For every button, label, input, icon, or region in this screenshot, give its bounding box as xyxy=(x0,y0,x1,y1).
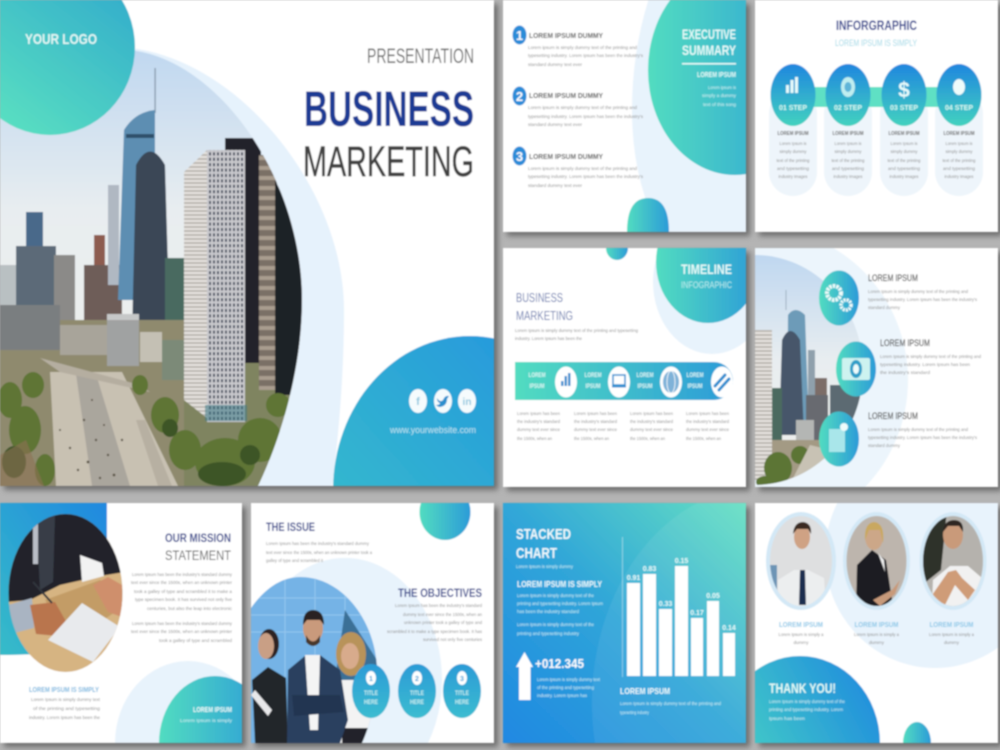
bar chart: 0.14 xyxy=(722,625,736,632)
text: mission paragraphs: type specimen book. It has survived not only five xyxy=(135,597,232,602)
list item 2: typesetting industry. Lorem Ipsum has been the industry's xyxy=(528,114,644,119)
panel: timeline slide: Lorem Ipsum is simply dummy text of the printing and typesetting xyxy=(515,328,638,333)
text: mission paragraphs xyxy=(131,572,233,643)
badge 3: TITLE xyxy=(455,690,470,697)
step 2 xyxy=(826,64,870,179)
text block 2 xyxy=(880,338,981,375)
text: mission paragraphs: took a galley of type and scrambled xyxy=(159,638,232,643)
panel: three points slide xyxy=(754,247,999,488)
text block 1 xyxy=(868,273,978,310)
step 4: 04 STEP xyxy=(945,105,973,112)
step 2: and typesetting xyxy=(832,166,864,171)
panel: mission slide xyxy=(0,503,271,743)
caption 3: Lorem Ipsum is simply a xyxy=(929,632,974,637)
heading: stacked chart: CHART xyxy=(516,545,557,562)
bar chart: 0.83 xyxy=(643,566,656,573)
text: growth figure: +012.345 xyxy=(535,656,584,671)
text: summary body: simply a dummy xyxy=(702,93,737,98)
heading: thank you: THANK YOU! xyxy=(769,680,836,696)
step 3: text of the printing xyxy=(888,158,921,163)
text: mission paragraphs: Lorem Ipsum has been the industry's standard dummy xyxy=(132,621,233,626)
text: your logo: YOUR LOGO xyxy=(25,31,97,48)
text: lorem ipsum callout: of the printing and typesetting xyxy=(33,706,100,711)
text: summary body: LOREM IPSUM xyxy=(697,72,736,79)
text: growth note: of the printing and typesetting xyxy=(537,685,594,690)
caption 3 xyxy=(929,620,974,645)
timeline columns: dummy text ever since xyxy=(574,427,617,432)
timeline band: IPSUM xyxy=(586,384,600,390)
text: mission paragraphs: text ever since the 1500s, when an unknown printer xyxy=(131,580,232,585)
portrait: woman in blazer xyxy=(843,510,910,610)
text: lorem ipsum callout: Lorem Ipsum is simply dummy text xyxy=(31,697,101,702)
step 4: LOREM IPSUM xyxy=(944,131,975,137)
list item 1 xyxy=(512,26,644,67)
step 3: Lorem Ipsum is xyxy=(890,141,918,146)
caption 2: Lorem Ipsum is simply a xyxy=(854,632,899,637)
caption 3: LOREM IPSUM xyxy=(930,620,974,629)
panel: infographic steps slide xyxy=(755,0,998,232)
text: presentation: PRESENTATION xyxy=(367,45,474,68)
text: mission paragraphs: text ever since the 1500s, when an unknown printer xyxy=(131,629,232,634)
bar chart xyxy=(622,537,736,677)
text: thank you body xyxy=(769,699,845,721)
caption 1: Lorem Ipsum is simply a xyxy=(778,632,824,637)
heading: business marketing xyxy=(516,292,574,321)
shape: small circle xyxy=(903,722,931,743)
text block 1: LOREM IPSUM xyxy=(868,273,918,284)
photo: signing document xyxy=(5,510,127,675)
shape: thank you blob xyxy=(720,656,880,743)
list item 1: typesetting industry. Lorem Ipsum has been the industry's xyxy=(528,53,644,58)
bar chart: 0.05 xyxy=(706,593,720,600)
text: thank you body: printing and typesetting industry. Lorem xyxy=(769,707,843,712)
timeline columns: the industry's standard xyxy=(574,419,617,424)
step 1: Lorem Ipsum is xyxy=(780,141,807,146)
timeline band: LOREM xyxy=(584,373,602,379)
list item 1: LOREM IPSUM DUMMY xyxy=(529,33,603,40)
text block 3: standard dummy xyxy=(868,443,901,448)
bar chart: 0.33 xyxy=(659,601,672,608)
step 4: industry Images xyxy=(944,174,974,179)
text block 3: LOREM IPSUM xyxy=(868,411,918,422)
text block 1: standard dummy xyxy=(868,305,901,310)
text block 1: Lorem Ipsum is simply dummy text of the printing and xyxy=(868,289,968,294)
timeline columns: the industry's standard xyxy=(630,419,673,424)
caption 1 xyxy=(778,620,824,645)
timeline band xyxy=(515,362,733,400)
text: summary body: Lorem ipsum is xyxy=(708,85,737,90)
badge 1 xyxy=(352,664,390,718)
text: chart description: LOREM IPSUM IS SIMPLY xyxy=(517,579,602,589)
text: chart description: printing and typesetting industry xyxy=(517,631,580,636)
step 1: industry Images xyxy=(778,174,808,179)
list item 3: 3 xyxy=(516,149,523,164)
text: objectives body xyxy=(387,603,483,642)
timeline band: IPSUM xyxy=(530,384,544,390)
panel: executive summary slide xyxy=(502,0,747,233)
text: growth note: industry. Lorem Ipsum has xyxy=(537,693,588,698)
timeline columns: the 1500s, when an xyxy=(686,436,721,441)
timeline columns: dummy text ever since xyxy=(686,427,729,432)
list item 3: typesetting industry. Lorem Ipsum has been the industry's xyxy=(528,174,644,179)
list item 1: Lorem ipsum is simply dummy text of the printing and xyxy=(528,45,637,50)
heading: our mission statement: STATEMENT xyxy=(165,547,231,563)
text: summary body xyxy=(697,72,737,107)
text: growth note: Lorem Ipsum is simply dummy text xyxy=(537,677,601,682)
step 1: LOREM IPSUM xyxy=(778,131,809,137)
badge 1: TITLE xyxy=(364,690,379,697)
step 3: simply dummy xyxy=(890,149,918,154)
list item 3 xyxy=(512,146,644,188)
timeline columns: the industry's standard xyxy=(517,419,560,424)
text: chart caption: typesetting industry xyxy=(620,710,650,715)
list item 2 xyxy=(512,86,644,127)
timeline columns: the 1500s, when an xyxy=(630,436,665,441)
heading: executive summary: SUMMARY xyxy=(682,42,736,58)
badge 3: 3 xyxy=(460,676,464,683)
text block 3: Lorem Ipsum is simply dummy text of the printing and xyxy=(868,427,968,432)
step 4: Lorem Ipsum is xyxy=(946,141,973,146)
step 4: text of the printing xyxy=(942,158,976,163)
text: website: www.yourwebsite.com xyxy=(389,425,476,435)
text: chart caption: Lorem Ipsum is simply dummy text of the printing and xyxy=(620,701,721,706)
timeline columns: the 1500s, when an xyxy=(574,436,609,441)
text: lorem ipsum callout: industry. Lorem Ipsum has been the xyxy=(29,715,100,720)
panel: team and thank-you slide xyxy=(720,442,1000,743)
step 3: $ xyxy=(898,79,910,102)
step 2: simply dummy xyxy=(834,149,862,154)
list item 3: Lorem ipsum is simply dummy text of the printing and xyxy=(528,166,637,171)
text: chart caption: LOREM IPSUM xyxy=(620,686,670,696)
list item 3: standard dummy text ever xyxy=(528,183,582,188)
icon: document xyxy=(819,412,859,466)
text: issue body xyxy=(266,541,372,563)
text: issue body: galley of type and scrambled it xyxy=(266,558,324,563)
heading: stacked chart: STACKED xyxy=(516,526,571,543)
step 1: and typesetting xyxy=(777,166,809,171)
step 2: text of the printing xyxy=(832,158,865,163)
text: objectives body: unknown printer took a galley of type and xyxy=(404,620,482,625)
timeline band: IPSUM xyxy=(638,384,652,390)
text: infographic label: INFOGRAPHIC xyxy=(681,280,732,290)
timeline band: IPSUM xyxy=(688,384,702,390)
text: thank you body: Lorem Ipsum is simply dummy text of the xyxy=(769,699,845,704)
step 3: 03 STEP xyxy=(890,105,918,112)
badge 2: TITLE xyxy=(410,690,425,697)
step 3 xyxy=(882,64,926,179)
text block 2: the industry's standard xyxy=(880,370,930,375)
heading: our mission statement xyxy=(165,531,231,563)
text: subtitle: LOREM IPSUM IS SIMPLY xyxy=(835,38,917,48)
heading: executive summary xyxy=(682,26,736,58)
timeline band: LOREM xyxy=(686,373,704,379)
heading: timeline: TIMELINE xyxy=(681,261,732,277)
text: chart caption xyxy=(620,686,721,715)
text: mission paragraphs: Lorem Ipsum has been the industry's standard dummy xyxy=(132,572,233,577)
text: corner label: Lorem Ipsum is simply xyxy=(180,718,233,723)
step 2: industry Images xyxy=(834,174,863,179)
list item 1: 1 xyxy=(516,28,523,43)
bar chart: 0.17 xyxy=(690,610,704,617)
step 1: text of the printing xyxy=(776,158,810,163)
list item 2: LOREM IPSUM DUMMY xyxy=(529,93,603,100)
text: chart description: printing and typesetting industry. Lorem Ipsum xyxy=(517,601,603,606)
icons: social media xyxy=(409,389,476,413)
text block 2: typesetting industry. Lorem Ipsum has been xyxy=(880,362,970,367)
text block 3: typesetting industry. Lorem Ipsum has been the industry's xyxy=(868,435,978,440)
timeline columns: the industry's standard xyxy=(686,419,729,424)
text block 1: typesetting industry. Lorem Ipsum has been the industry's xyxy=(868,297,978,302)
text: growth note xyxy=(537,677,601,698)
photo: tower skyline xyxy=(754,254,861,486)
step 2: Lorem Ipsum is xyxy=(834,141,862,146)
shape: contact blob xyxy=(332,335,496,488)
caption 1: LOREM IPSUM xyxy=(779,620,823,629)
step 1: simply dummy xyxy=(780,149,807,154)
panel: cover slide xyxy=(0,0,495,487)
list item 2: standard dummy text ever xyxy=(528,122,582,127)
timeline columns: Lorem Ipsum has been xyxy=(630,411,673,416)
caption 2 xyxy=(854,620,899,645)
step 1 xyxy=(770,64,816,179)
list item 3: LOREM IPSUM DUMMY xyxy=(529,154,603,161)
text: mission paragraphs: centuries, but also the leap into electronic xyxy=(147,606,233,611)
badge 1: HERE xyxy=(364,700,378,706)
text block 3 xyxy=(868,411,978,448)
text: chart description xyxy=(517,579,603,636)
text block 2: Lorem Ipsum is simply dummy text of the printing and xyxy=(880,354,981,359)
panel: timeline slide xyxy=(502,247,747,488)
text: objectives body: Lorem Ipsum has been the industry's standard xyxy=(395,603,482,608)
timeline columns: Lorem Ipsum has been xyxy=(686,411,729,416)
heading: executive summary: EXECUTIVE xyxy=(682,26,736,42)
badge 3 xyxy=(443,664,481,718)
text: chart description: Lorem Ipsum is simply dummy text of the xyxy=(517,593,594,598)
badge 3: HERE xyxy=(455,700,469,706)
text: thank you body: Ipsum has been xyxy=(769,716,805,721)
step 2: LOREM IPSUM xyxy=(832,131,864,137)
timeline band: LOREM xyxy=(528,373,546,379)
caption 2: LOREM IPSUM xyxy=(854,620,898,629)
text: issue body: Lorem Ipsum has been the industry's standard dummy xyxy=(266,541,370,546)
timeline columns: the 1500s, when an xyxy=(517,436,552,441)
badge 2: HERE xyxy=(410,700,424,706)
step 4: and typesetting xyxy=(943,166,975,171)
text: chart description: has been the industry standard xyxy=(517,609,579,614)
icon: gears xyxy=(819,270,859,326)
step 3: and typesetting xyxy=(888,166,920,171)
step 2: 02 STEP xyxy=(834,105,862,112)
timeline columns: dummy text ever since xyxy=(630,427,673,432)
heading: the objectives: THE OBJECTIVES xyxy=(398,586,482,600)
bar chart: 0.91 xyxy=(627,575,640,582)
heading: business marketing: MARKETING xyxy=(516,308,573,323)
step 1: 01 STEP xyxy=(779,105,807,112)
step 4 xyxy=(936,64,982,179)
text: corner label: LOREM IPSUM xyxy=(193,707,232,714)
heading: infographic: INFORGRAPHIC xyxy=(836,17,917,33)
text: issue body: text ever since the 1500s, when an unknown printer took a xyxy=(266,550,372,555)
caption 1: dummy xyxy=(794,640,809,645)
text: mission paragraphs: took a galley of type and scrambled it to make a xyxy=(134,589,232,594)
photo: city skyline xyxy=(0,40,310,490)
timeline columns: dummy text ever since xyxy=(517,427,560,432)
heading: marketing: MARKETING xyxy=(303,138,474,186)
badge 2 xyxy=(398,664,436,718)
portrait: man in tie xyxy=(765,510,837,610)
step 4: simply dummy xyxy=(946,149,973,154)
panel: stacked chart slide xyxy=(503,488,928,743)
heading: the issue: THE ISSUE xyxy=(266,520,315,534)
badge 1: 1 xyxy=(369,676,373,683)
step 3: LOREM IPSUM xyxy=(888,131,920,137)
icons: social media: in xyxy=(463,397,471,408)
panel: stacked chart slide: Lorem Ipsum is simply dummy xyxy=(516,564,574,569)
timeline columns: Lorem Ipsum has been xyxy=(574,411,617,416)
panel: timeline slide: industry. Lorem Ipsum has been the xyxy=(515,336,582,341)
text: corner label xyxy=(180,707,233,723)
text: summary body: text of this song xyxy=(703,102,736,107)
text: objectives body: survived not only five centuries xyxy=(423,637,483,642)
list item 2: Lorem ipsum is simply dummy text of the printing and xyxy=(528,105,637,110)
heading: business: BUSINESS xyxy=(304,81,474,137)
caption 3: dummy xyxy=(944,640,960,645)
shape: logo blob xyxy=(0,0,135,135)
caption 2: dummy xyxy=(869,640,885,645)
list item 1: standard dummy text ever xyxy=(528,62,582,67)
portrait: smiling man xyxy=(920,510,986,610)
bar chart: 0.15 xyxy=(675,558,688,565)
list item 2: 2 xyxy=(516,89,523,104)
panel: issue and objectives slide xyxy=(248,484,494,743)
text: objectives body: dummy text ever since the 1500s, when an xyxy=(403,612,482,617)
step 3: industry Images xyxy=(890,174,919,179)
badge 2: 2 xyxy=(415,676,419,683)
text: lorem ipsum callout xyxy=(29,687,101,720)
timeline columns: Lorem Ipsum has been xyxy=(517,411,560,416)
timeline columns xyxy=(517,411,729,441)
timeline band: LOREM xyxy=(636,373,654,379)
heading: stacked chart xyxy=(516,526,571,562)
arrow: growth xyxy=(516,652,533,700)
text: objectives body: scrambled it to make a type specimen book. It has xyxy=(387,629,483,634)
heading: our mission statement: OUR MISSION xyxy=(165,531,231,545)
photo: business team xyxy=(251,570,381,743)
icons: social media: f xyxy=(416,396,420,408)
heading: business marketing: BUSINESS xyxy=(516,290,563,305)
text block 2: LOREM IPSUM xyxy=(880,338,930,349)
shape: small circle xyxy=(627,198,669,232)
text: chart description: Lorem Ipsum is simply dummy text of the xyxy=(517,622,594,627)
icon: money xyxy=(836,342,876,396)
text: lorem ipsum callout: LOREM IPSUM IS SIMPLY xyxy=(29,687,99,694)
